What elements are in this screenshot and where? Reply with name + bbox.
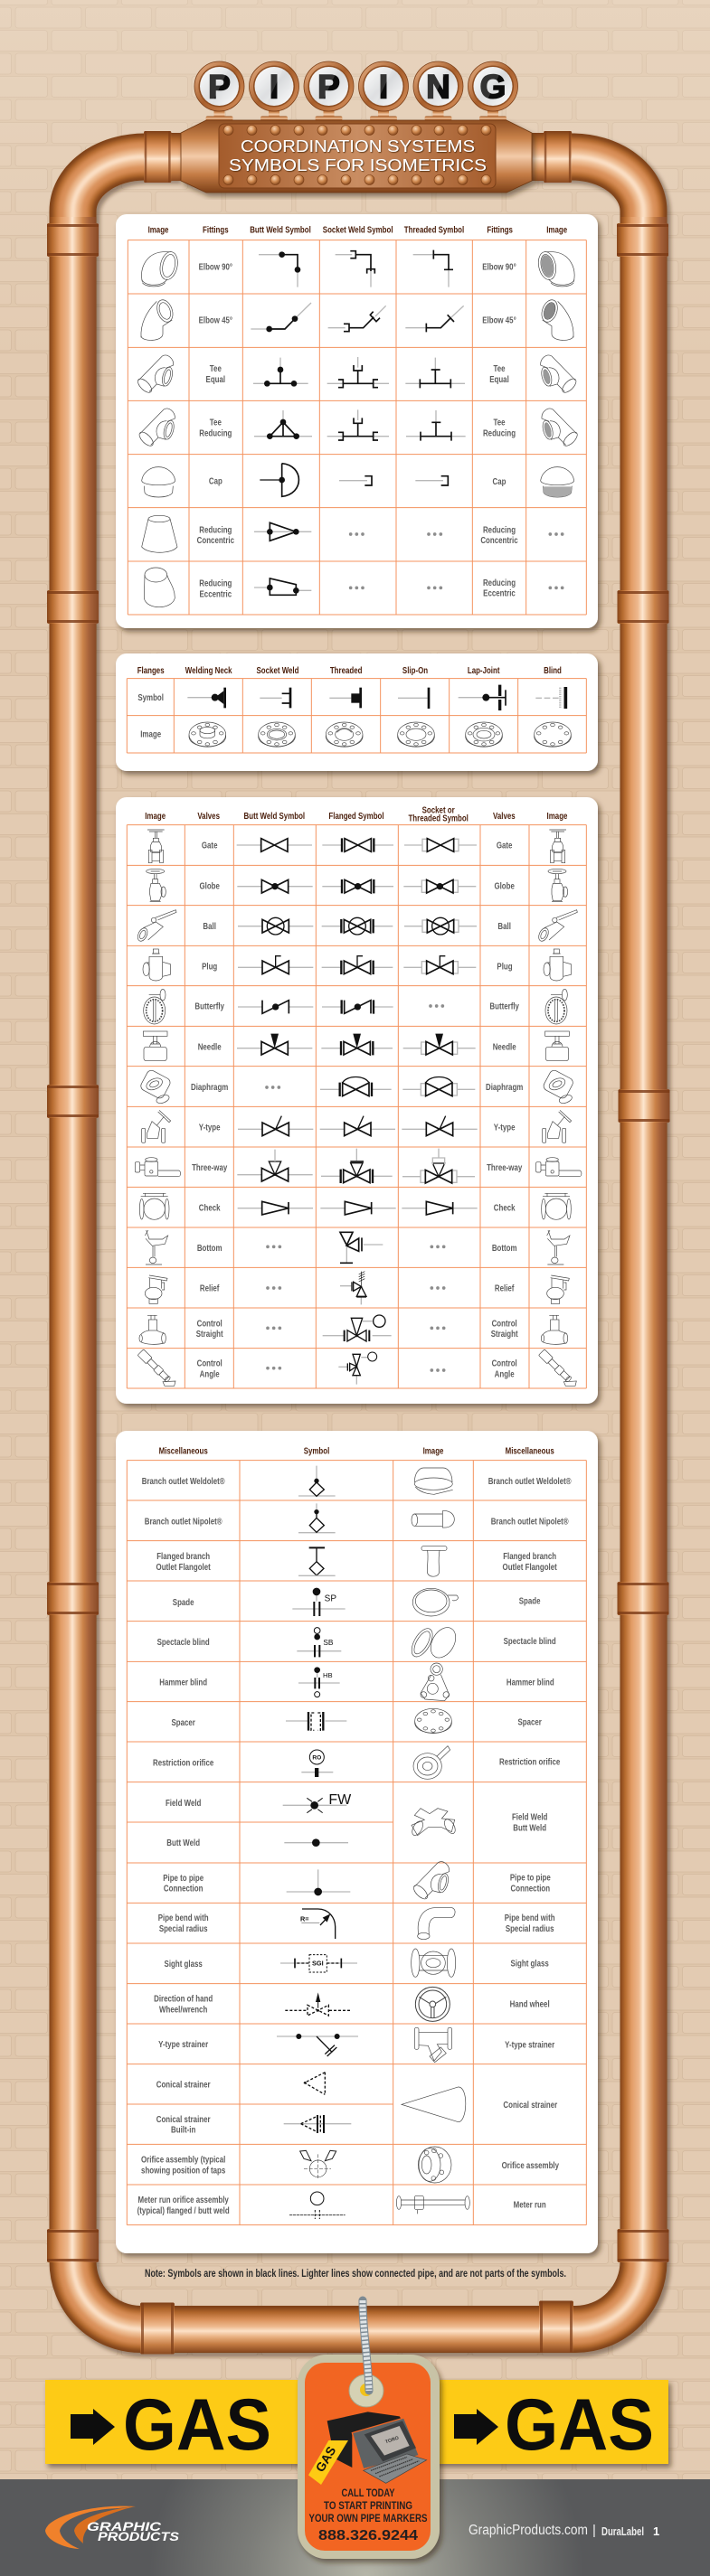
website and DuraLabel brand: | bbox=[592, 2523, 596, 2538]
row: hammer blind: Hammer blind bbox=[159, 1678, 207, 1688]
row: ball valve: Ball bbox=[203, 921, 216, 931]
row: reducing eccentric bbox=[144, 568, 563, 607]
flanges header row: Lap-Joint bbox=[468, 665, 500, 675]
row: ball valve bbox=[136, 910, 577, 943]
row: elbow 45 bbox=[141, 297, 573, 340]
flanges header row: Flanges bbox=[137, 665, 165, 675]
row: flanged branch outlet flangolet: Outlet Flangolet bbox=[156, 1562, 211, 1572]
row: gate valve bbox=[147, 830, 566, 863]
gauge letter P bbox=[194, 61, 244, 121]
row: restriction orifice bbox=[153, 1746, 560, 1779]
row: branch outlet nipolet bbox=[145, 1503, 569, 1533]
row: bottom valve: Bottom bbox=[197, 1243, 222, 1253]
row: conical strainer built-in: Built-in bbox=[171, 2125, 195, 2135]
row: spacer: Spacer bbox=[517, 1717, 542, 1727]
row: diaphragm valve: Diaphragm bbox=[486, 1082, 523, 1092]
row: conical strainer bbox=[156, 2073, 325, 2094]
title: PIPING gauges bbox=[194, 61, 517, 121]
valves header row: Image bbox=[547, 811, 568, 821]
tag call to action: 888.326.9244 bbox=[318, 2528, 418, 2543]
row: conical strainer: Conical strainer bbox=[156, 2080, 211, 2090]
row: branch outlet weldolet: Branch outlet Weldolet® bbox=[142, 1476, 225, 1486]
row: needle valve bbox=[143, 1031, 569, 1061]
row: cap: Cap bbox=[209, 476, 222, 486]
row: field weld: Field Weld bbox=[166, 1798, 201, 1808]
flanges header row: Threaded bbox=[330, 665, 362, 675]
row: meter run bbox=[137, 2192, 546, 2219]
Graphic Products logo: GRAPHIC bbox=[87, 2519, 162, 2534]
row: restriction orifice: Restriction orifice bbox=[153, 1758, 213, 1768]
row: relief valve: Relief bbox=[495, 1283, 514, 1293]
row: sight glass bbox=[165, 1949, 549, 1977]
row: control angle valve: Angle bbox=[200, 1369, 220, 1379]
yellow GAS pipe marker right bbox=[434, 2380, 668, 2466]
rivets bbox=[223, 125, 491, 184]
row: elbow 90: Elbow 90° bbox=[482, 262, 516, 272]
valves header row bbox=[145, 805, 568, 823]
valves header row: Socket or bbox=[422, 805, 455, 815]
row: flanged branch outlet flangolet: Outlet Flangolet bbox=[503, 1562, 557, 1572]
row: hammer blind: Hammer blind bbox=[506, 1678, 554, 1688]
row: meter run: (typical) flanged / butt weld bbox=[137, 2205, 230, 2215]
fittings header row bbox=[148, 225, 567, 235]
row: y-type strainer: Y-type strainer bbox=[158, 2039, 209, 2049]
row: spectacle blind bbox=[157, 1623, 556, 1662]
row: bottom valve: Bottom bbox=[492, 1243, 517, 1253]
gauge letter I bbox=[250, 61, 298, 121]
gauge letter I bbox=[358, 61, 409, 121]
gauge letter I: I bbox=[270, 69, 279, 105]
fittings header row: Image bbox=[148, 225, 169, 235]
valves header row: Butt Weld Symbol bbox=[244, 811, 305, 821]
note text: Note: Symbols are shown in black lines. Lighter lines show connected pipe, and are not parts of the symbols. bbox=[145, 2269, 566, 2280]
gauge letter P bbox=[304, 61, 354, 121]
row: y-type valve bbox=[142, 1110, 572, 1142]
row: control straight valve: Straight bbox=[491, 1329, 518, 1339]
row: ball valve: Ball bbox=[497, 921, 511, 931]
gauge letter N bbox=[413, 61, 463, 121]
row: cap: Cap bbox=[493, 476, 506, 486]
row: gate valve: Gate bbox=[202, 841, 218, 851]
row: field weld: FW bbox=[328, 1792, 352, 1808]
row: pipe bend with special radius: Pipe bend with bbox=[505, 1913, 555, 1923]
row: meter run: Meter run bbox=[514, 2200, 546, 2210]
row: pipe bend with special radius bbox=[158, 1908, 555, 1940]
row: branch outlet weldolet bbox=[142, 1466, 572, 1496]
hang tag bbox=[298, 2300, 440, 2559]
row: field weld bbox=[166, 1792, 352, 1813]
row: globe valve: Globe bbox=[494, 881, 515, 891]
row: y-type strainer: Y-type strainer bbox=[505, 2040, 555, 2050]
row: reducing eccentric: Eccentric bbox=[483, 588, 516, 598]
row: flange symbols: Symbol bbox=[137, 692, 164, 702]
row: orifice assembly bbox=[141, 2147, 559, 2183]
row: direction of hand wheel: Wheel/wrench bbox=[159, 2005, 207, 2015]
row: tee reducing bbox=[137, 409, 580, 448]
row: three-way valve bbox=[135, 1149, 582, 1183]
row: spectacle blind: Spectacle blind bbox=[504, 1636, 556, 1646]
flanges table grid bbox=[127, 679, 586, 753]
row: needle valve: Needle bbox=[493, 1042, 516, 1052]
row: plug valve: Plug bbox=[202, 962, 217, 972]
website and DuraLabel brand: DuraLabel bbox=[601, 2524, 644, 2538]
fittings header row: Butt Weld Symbol bbox=[250, 225, 311, 235]
row: control angle valve bbox=[137, 1349, 576, 1386]
miscellaneous header row: Image bbox=[423, 1446, 444, 1456]
valves header row: Valves bbox=[197, 811, 220, 821]
icon: label printer: GAS bbox=[313, 2444, 338, 2475]
row: control straight valve: Control bbox=[197, 1319, 222, 1329]
gauge letter G: G bbox=[480, 69, 506, 105]
flanges header row: Socket Weld bbox=[257, 665, 298, 675]
row: butt weld: Butt Weld bbox=[166, 1838, 200, 1847]
subtitle bbox=[229, 136, 487, 174]
row: meter run: Meter run orifice assembly bbox=[138, 2195, 229, 2205]
row: reducing eccentric: Eccentric bbox=[200, 589, 232, 599]
row: butterfly valve bbox=[144, 989, 567, 1024]
row: pipe bend with special radius: Special radius bbox=[506, 1923, 554, 1933]
flanges header row: Welding Neck bbox=[185, 665, 232, 675]
pipe couplings bbox=[47, 131, 669, 2354]
row: needle valve: Needle bbox=[198, 1042, 222, 1052]
icon: label printer: TORO bbox=[384, 2436, 400, 2445]
gauge letter N: N bbox=[426, 69, 450, 105]
row: pipe to pipe connection: Pipe to pipe bbox=[163, 1873, 204, 1883]
row: spade: Spade bbox=[519, 1596, 541, 1606]
row: plug valve bbox=[143, 949, 571, 981]
row: pipe bend with special radius: R= bbox=[300, 1914, 309, 1923]
valves header row: Threaded Symbol bbox=[408, 813, 469, 823]
yellow GAS pipe marker right: GAS bbox=[505, 2384, 654, 2466]
row: control straight valve bbox=[139, 1315, 568, 1344]
row: reducing concentric: Concentric bbox=[480, 535, 518, 545]
icon: conical strainer image with label bbox=[402, 2087, 558, 2122]
row: orifice assembly: showing position of taps bbox=[141, 2166, 225, 2176]
manifold plate with subtitle bbox=[181, 120, 532, 193]
row: flanged branch outlet flangolet: Flanged branch bbox=[156, 1551, 210, 1561]
flanges header row: Slip-On bbox=[402, 665, 428, 675]
row: elbow 45: Elbow 45° bbox=[482, 315, 516, 325]
row: spectacle blind: SB bbox=[323, 1638, 334, 1647]
row: reducing concentric: Reducing bbox=[483, 525, 516, 535]
row: direction of hand wheel bbox=[154, 1987, 550, 2021]
row: orifice assembly: Orifice assembly (typical bbox=[141, 2155, 225, 2165]
row: restriction orifice: RO bbox=[312, 1754, 321, 1761]
row: pipe to pipe connection: Pipe to pipe bbox=[510, 1873, 551, 1883]
row: tee reducing: Tee bbox=[210, 418, 222, 428]
row: conical strainer built-in bbox=[156, 2114, 351, 2135]
row: spade: SP bbox=[325, 1594, 336, 1604]
row: direction of hand wheel: Direction of hand bbox=[154, 1994, 213, 2004]
row: check valve: Check bbox=[199, 1203, 221, 1213]
gauge letter G bbox=[469, 61, 517, 121]
fittings header row: Image bbox=[546, 225, 567, 235]
valves table grid bbox=[127, 825, 586, 1388]
website and DuraLabel brand: GraphicProducts.com bbox=[469, 2523, 588, 2538]
row: relief valve bbox=[145, 1272, 569, 1304]
row: pipe to pipe connection bbox=[163, 1862, 551, 1901]
row: reducing concentric bbox=[142, 515, 563, 552]
row: check valve bbox=[139, 1193, 571, 1219]
row: branch outlet nipolet: Branch outlet Nipolet® bbox=[145, 1517, 222, 1527]
tag eyelet bbox=[349, 2374, 383, 2407]
icon: cross fitting with field and butt weld labels: Field Weld bbox=[512, 1812, 547, 1822]
tag call to action: CALL TODAY bbox=[342, 2487, 394, 2499]
row: sight glass: Sight glass bbox=[165, 1959, 203, 1969]
row: tee equal: Equal bbox=[489, 374, 509, 384]
valves header row: Valves bbox=[493, 811, 516, 821]
row: flanged branch outlet flangolet: Flanged branch bbox=[503, 1551, 556, 1561]
row: flanged branch outlet flangolet bbox=[156, 1547, 557, 1576]
row: globe valve bbox=[147, 869, 568, 901]
row: reducing concentric: Concentric bbox=[197, 535, 234, 545]
miscellaneous header row: Miscellaneous bbox=[506, 1446, 554, 1456]
row: pipe to pipe connection: Connection bbox=[511, 1884, 550, 1894]
row: sight glass: Sight glass bbox=[511, 1959, 549, 1969]
row: branch outlet nipolet: Branch outlet Nipolet® bbox=[491, 1517, 569, 1527]
fittings header row: Threaded Symbol bbox=[404, 225, 464, 235]
row: spacer: Spacer bbox=[171, 1717, 195, 1727]
row: pipe to pipe connection: Connection bbox=[164, 1884, 203, 1894]
icon: conical strainer image with label: Conical strainer bbox=[503, 2100, 558, 2110]
subtitle: SYMBOLS FOR ISOMETRICS bbox=[229, 155, 487, 174]
row: gate valve: Gate bbox=[497, 841, 513, 851]
row: elbow 90 bbox=[142, 250, 574, 287]
row: flange images bbox=[140, 722, 571, 747]
row: three-way valve: Three-way bbox=[487, 1162, 522, 1172]
valves header row: Flanged Symbol bbox=[328, 811, 384, 821]
tag call to action: YOUR OWN PIPE MARKERS bbox=[309, 2512, 427, 2524]
row: diaphragm valve: Diaphragm bbox=[191, 1082, 228, 1092]
tag call to action bbox=[309, 2487, 427, 2543]
website and DuraLabel brand: 1 bbox=[653, 2524, 659, 2538]
row: elbow 45: Elbow 45° bbox=[199, 315, 232, 325]
fittings header row: Fittings bbox=[487, 225, 513, 235]
row: control straight valve: Straight bbox=[196, 1329, 223, 1339]
row: elbow 90: Elbow 90° bbox=[199, 262, 232, 272]
row: tee equal: Equal bbox=[206, 374, 225, 384]
row: spade: Spade bbox=[173, 1597, 194, 1607]
row: spectacle blind: Spectacle blind bbox=[157, 1637, 210, 1647]
row: reducing eccentric: Reducing bbox=[483, 578, 516, 588]
row: restriction orifice: Restriction orifice bbox=[499, 1757, 560, 1767]
yellow GAS pipe marker left bbox=[45, 2380, 303, 2466]
row: spacer bbox=[171, 1708, 542, 1734]
row: hammer blind bbox=[159, 1663, 554, 1701]
row: butt weld bbox=[166, 1838, 348, 1847]
tag call to action: TO START PRINTING bbox=[324, 2499, 412, 2512]
fittings header row: Socket Weld Symbol bbox=[323, 225, 393, 235]
gauge letter P: P bbox=[208, 69, 231, 105]
panel: valves bbox=[116, 797, 598, 1404]
row: branch outlet weldolet: Branch outlet Weldolet® bbox=[488, 1476, 572, 1486]
row: direction of hand wheel: Hand wheel bbox=[510, 1999, 550, 2009]
row: orifice assembly: Orifice assembly bbox=[502, 2160, 559, 2170]
miscellaneous header row: Miscellaneous bbox=[159, 1446, 208, 1456]
row: control straight valve: Control bbox=[492, 1319, 517, 1329]
icon: label printer bbox=[308, 2411, 427, 2485]
zip tie bbox=[363, 2300, 369, 2391]
row: butterfly valve: Butterfly bbox=[489, 1001, 519, 1011]
row: three-way valve: Three-way bbox=[192, 1162, 227, 1172]
row: y-type valve: Y-type bbox=[494, 1123, 516, 1133]
fittings header row: Fittings bbox=[203, 225, 229, 235]
row: diaphragm valve bbox=[139, 1068, 574, 1105]
row: cap bbox=[142, 464, 574, 497]
row: pipe bend with special radius: Pipe bend with bbox=[158, 1913, 209, 1923]
row: relief valve: Relief bbox=[200, 1283, 219, 1293]
footer bar bbox=[0, 2479, 710, 2576]
gauge letter P: P bbox=[317, 69, 340, 105]
row: hammer blind: HB bbox=[323, 1671, 333, 1679]
miscellaneous table grid bbox=[127, 1461, 586, 2225]
row: tee equal bbox=[136, 355, 578, 395]
gauge letter I: I bbox=[379, 69, 388, 105]
Graphic Products logo: PRODUCTS bbox=[98, 2529, 180, 2543]
icon: cross fitting with field and butt weld labels: Butt Weld bbox=[513, 1823, 546, 1833]
row: plug valve: Plug bbox=[497, 962, 513, 972]
miscellaneous header row: Symbol bbox=[304, 1446, 329, 1456]
miscellaneous header row bbox=[159, 1446, 554, 1456]
row: tee reducing: Reducing bbox=[199, 428, 232, 438]
row: tee equal: Tee bbox=[493, 363, 506, 373]
row: check valve: Check bbox=[494, 1203, 516, 1213]
panel: flanges bbox=[116, 653, 598, 771]
row: flange images: Image bbox=[140, 729, 161, 739]
flanges header row bbox=[137, 665, 562, 675]
row: conical strainer built-in: Conical strainer bbox=[156, 2114, 211, 2124]
row: reducing eccentric: Reducing bbox=[199, 578, 232, 588]
row: pipe bend with special radius: Special radius bbox=[159, 1923, 208, 1933]
row: sight glass: SGI bbox=[312, 1960, 324, 1968]
valves header row: Image bbox=[145, 811, 166, 821]
subtitle: COORDINATION SYSTEMS bbox=[241, 136, 475, 155]
row: y-type strainer bbox=[158, 2027, 555, 2063]
row: control angle valve: Control bbox=[492, 1359, 517, 1368]
row: control angle valve: Angle bbox=[495, 1369, 515, 1379]
row: bottom valve bbox=[145, 1230, 570, 1264]
Graphic Products logo bbox=[45, 2506, 180, 2549]
fittings table grid bbox=[128, 240, 586, 615]
flanges header row: Blind bbox=[544, 665, 562, 675]
icon: cross fitting with field and butt weld labels bbox=[410, 1809, 547, 1838]
row: globe valve: Globe bbox=[199, 881, 220, 891]
panel: fittings bbox=[116, 214, 598, 628]
row: butterfly valve: Butterfly bbox=[194, 1001, 224, 1011]
row: control angle valve: Control bbox=[197, 1359, 222, 1368]
row: y-type valve: Y-type bbox=[199, 1123, 221, 1133]
row: tee reducing: Tee bbox=[493, 418, 506, 428]
panel: miscellaneous bbox=[116, 1431, 598, 2253]
row: tee equal: Tee bbox=[210, 363, 222, 373]
row: tee reducing: Reducing bbox=[483, 428, 516, 438]
copper pipe frame bbox=[47, 131, 669, 2354]
row: spade bbox=[173, 1588, 541, 1616]
row: flange symbols bbox=[137, 685, 565, 710]
row: reducing concentric: Reducing bbox=[199, 525, 232, 535]
yellow GAS pipe marker left: GAS bbox=[123, 2384, 271, 2466]
